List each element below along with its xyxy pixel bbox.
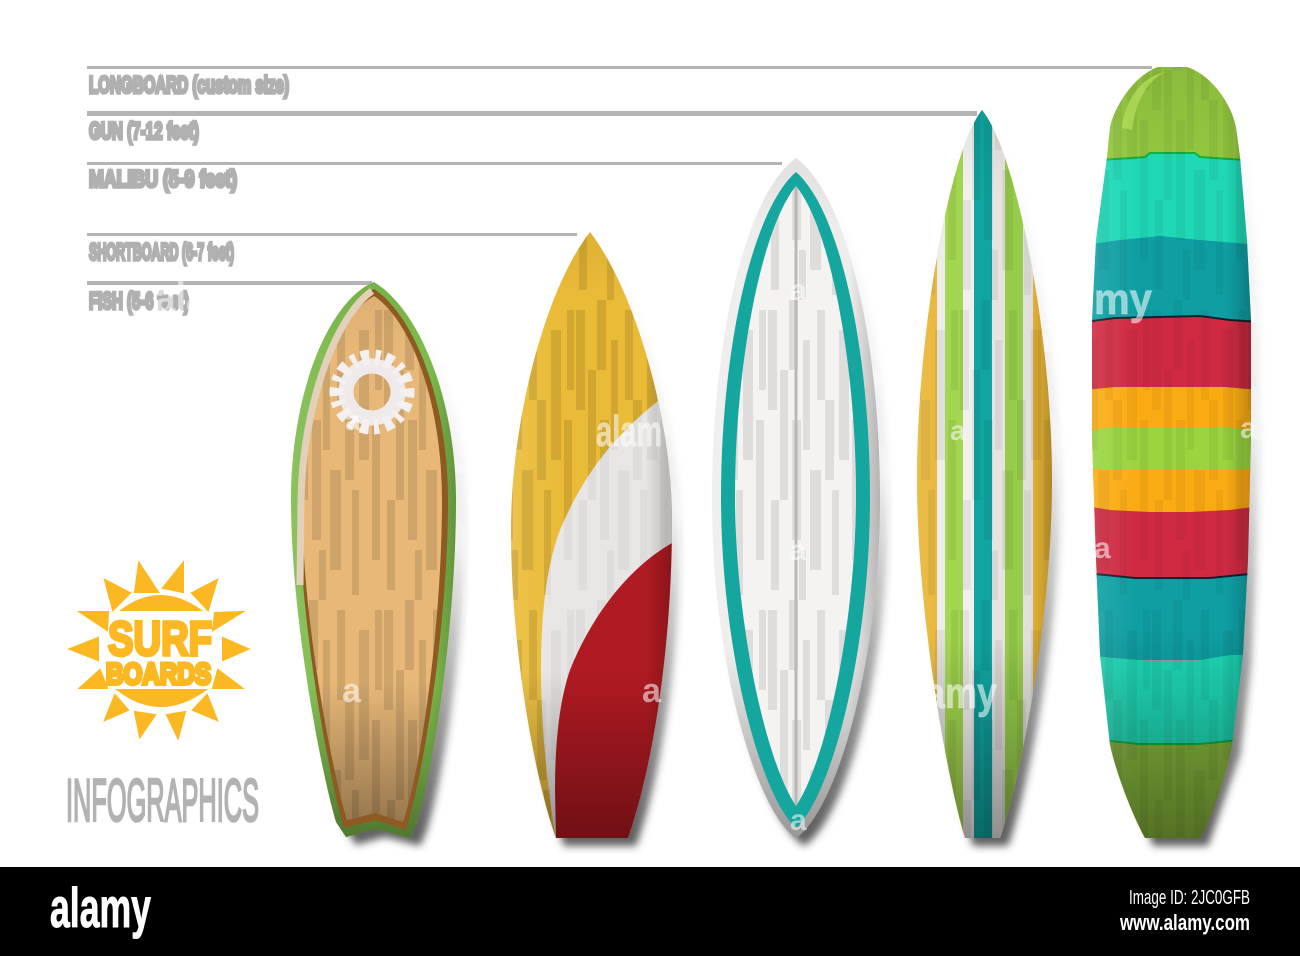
leader line: malibu: [87, 162, 782, 165]
band: orange: [1092, 387, 1251, 430]
white swoosh: [541, 398, 680, 840]
leader line: longboard: [87, 66, 1152, 69]
watermarks: a: [950, 415, 966, 446]
band: green bottom: [1110, 741, 1232, 838]
watermarks: alam: [596, 407, 662, 456]
surfboard 2: yellow white red shortboard: [505, 225, 680, 846]
watermarks: a: [790, 534, 807, 567]
surfboard 1: wooden fish: [285, 275, 466, 846]
white stripe inner right: [992, 105, 1005, 845]
label: malibu: MALIBU (5-9 feet): [89, 166, 237, 193]
band: teal 2: [1096, 574, 1248, 660]
watermarks: a: [1240, 412, 1257, 445]
surfboard 4: striped gun: [910, 105, 1060, 846]
white stripe right: [1023, 224, 1033, 747]
watermarks: a: [790, 804, 807, 837]
white stripe left: [937, 216, 945, 750]
band: red: [1092, 317, 1251, 390]
website: www.alamy.com: [1119, 910, 1250, 935]
footer logo: alamy: [50, 876, 151, 939]
band: aqua: [1096, 154, 1248, 245]
watermarks: [155, 273, 1257, 837]
watermarks: a: [1094, 532, 1111, 565]
band: red 2: [1094, 508, 1250, 578]
logo: surf boards sun: [70, 563, 248, 738]
highlight on left rail: [300, 291, 372, 585]
teal ring: [721, 172, 870, 828]
watermarks: alamy: [155, 273, 260, 322]
highlight at nose: [1122, 72, 1165, 130]
logo text: SURF: SURF: [108, 613, 212, 666]
watermarks: a: [642, 672, 662, 710]
label: shortboard: SHORTBOARD (6-7 feet): [89, 239, 234, 266]
surfboard 5: multicolour longboard: [1085, 60, 1260, 846]
logo text: BOARDS: BOARDS: [106, 658, 211, 691]
footer bar: [0, 867, 1300, 956]
watermarks: a: [790, 274, 807, 307]
white stripe inner left: [963, 105, 974, 845]
label: gun: GUN (7-12 feet): [89, 118, 199, 145]
watermarks: a: [342, 672, 362, 710]
surfboard 3: white malibu with teal ring: [705, 150, 888, 846]
watermarks: amy: [925, 669, 997, 718]
label: fish: FISH (5-6 feet): [89, 288, 189, 315]
green stripe left: [945, 105, 963, 845]
band: lime: [1085, 427, 1260, 472]
leader line: shortboard: [87, 233, 577, 236]
text: INFOGRAPHICS: [66, 767, 259, 834]
watermarks: a: [345, 405, 361, 436]
red swoosh: [555, 543, 680, 840]
teal centre stripe: [974, 105, 992, 845]
band: teal: [1092, 236, 1251, 320]
size labels with leader lines: [87, 66, 1152, 315]
band: orange 2: [1092, 468, 1250, 512]
sun rays: [70, 563, 248, 738]
watermarks: my: [1094, 275, 1152, 324]
icon: white sun on deck: [337, 357, 407, 427]
label: longboard: LONGBOARD (custom size): [89, 72, 289, 99]
leader line: fish: [87, 281, 372, 285]
green stripe right: [1005, 158, 1023, 822]
band: aqua 2: [1100, 655, 1243, 750]
leader line: gun: [87, 111, 977, 116]
band: green top: [1106, 67, 1240, 160]
